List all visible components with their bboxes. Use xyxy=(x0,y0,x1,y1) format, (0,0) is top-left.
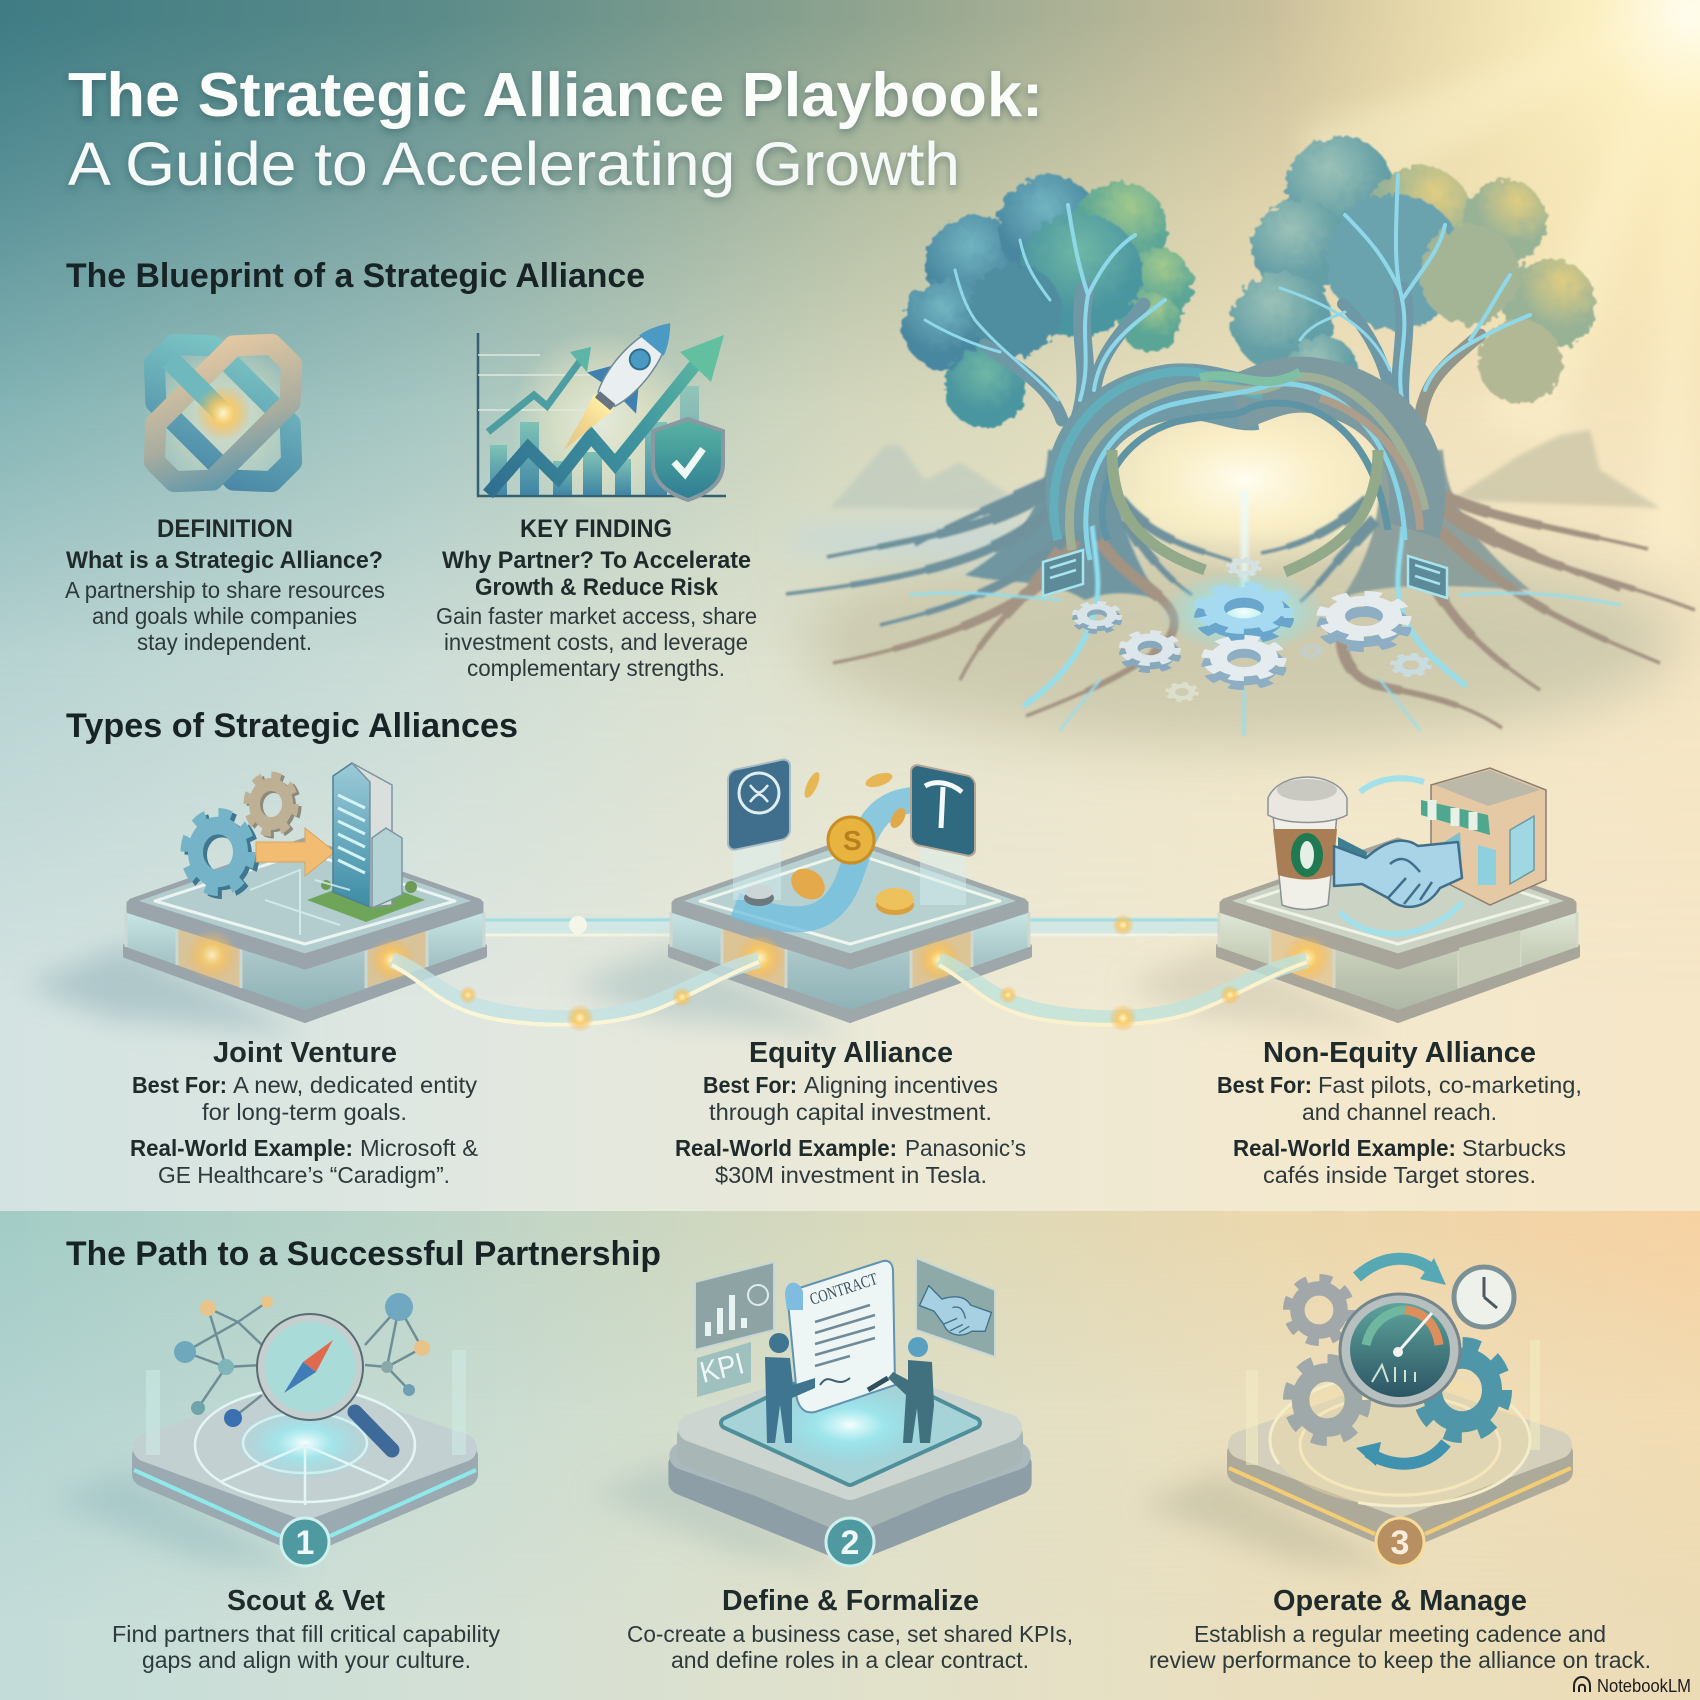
gears on the ground xyxy=(1075,558,1429,701)
step shadows xyxy=(50,1460,1400,1570)
text block: key finding: complementary strengths. xyxy=(467,655,725,681)
text block: define and formalize: and define roles in a clear contract. xyxy=(671,1647,1029,1673)
panel: non-equity alliance platform and icon xyxy=(1218,768,1578,1021)
trees: trunks and branches xyxy=(925,175,1530,420)
badge 2: 2 xyxy=(841,1524,859,1562)
heading: path: The Path to a Successful Partnership xyxy=(66,1235,661,1273)
text block: key finding: Growth & Reduce Risk xyxy=(475,574,719,601)
radar rings xyxy=(195,1388,415,1505)
text block: equity alliance xyxy=(675,1037,1026,1188)
text block: scout and vet xyxy=(112,1585,500,1673)
panel: step 2 define and formalize xyxy=(682,1258,1018,1566)
text block: operate and manage xyxy=(1149,1585,1651,1673)
illustration: two trees with intertwined roots and gears xyxy=(780,136,1695,745)
panel: step 1 scout and vet xyxy=(134,1293,476,1566)
contract scroll xyxy=(785,1261,895,1412)
clock xyxy=(1454,1267,1514,1327)
text block: definition: stay independent. xyxy=(137,629,312,655)
network nodes xyxy=(174,1293,430,1427)
panel: handshake xyxy=(915,1258,995,1357)
text block: non-equity alliance: Fast pilots, co-marketing, xyxy=(1318,1072,1582,1098)
trees: root flares xyxy=(965,450,1530,600)
icon: arrows xyxy=(1340,778,1462,934)
icon: coffee cup xyxy=(1268,777,1347,910)
rings xyxy=(1270,1374,1530,1506)
text block: joint venture: GE Healthcare’s “Caradigm”. xyxy=(158,1162,450,1188)
text block: scout and vet: Scout & Vet xyxy=(227,1585,385,1617)
inner screen xyxy=(726,1362,975,1480)
scene: light beam xyxy=(1241,490,1248,630)
text block: non-equity alliance: and channel reach. xyxy=(1302,1099,1497,1125)
lower connector tubes between platforms xyxy=(392,960,1307,1032)
icon: coins: S xyxy=(843,825,862,856)
text block: scout and vet: Find partners that fill critical capability xyxy=(112,1621,500,1647)
title: A Guide to Accelerating Growth xyxy=(68,130,960,198)
icon: GE card xyxy=(728,758,790,900)
text block: operate and manage: Operate & Manage xyxy=(1273,1585,1527,1617)
scene: central glow xyxy=(1075,385,1415,575)
icon: interlocked links xyxy=(136,326,310,500)
text block: joint venture: Best For: xyxy=(132,1072,227,1098)
scene: landscape xyxy=(780,430,1680,745)
text block: scout and vet: gaps and align with your culture. xyxy=(142,1647,471,1673)
heading: blueprint: The Blueprint of a Strategic Alliance xyxy=(66,257,645,295)
icon: coins xyxy=(744,770,914,915)
text block: equity alliance: through capital investment. xyxy=(709,1099,992,1125)
text block: joint venture: Real-World Example: xyxy=(130,1135,353,1161)
text block: joint venture: Joint Venture xyxy=(213,1037,397,1069)
text block: key finding: Gain faster market access, share xyxy=(436,603,757,629)
upper connector tubes between platforms xyxy=(480,914,1222,936)
panel: joint venture platform and icon xyxy=(125,763,485,1021)
figures xyxy=(765,1333,934,1443)
circuit lines on platform xyxy=(250,870,350,935)
text block: operate and manage: review performance to keep the alliance on track. xyxy=(1149,1647,1651,1673)
badge 2 xyxy=(826,1518,874,1566)
panel: dashboard xyxy=(695,1262,774,1350)
glowing edge xyxy=(134,1470,476,1536)
heading: types: Types of Strategic Alliances xyxy=(66,707,518,745)
tree left: crown xyxy=(902,176,1193,428)
icon: magnifier with compass xyxy=(257,1314,392,1450)
badge 3 xyxy=(1376,1518,1424,1566)
text block: joint venture: for long-term goals. xyxy=(202,1099,407,1125)
text block: key finding: investment costs, and leverage xyxy=(444,629,748,655)
icon: tower on green base xyxy=(307,763,425,922)
trees: root system xyxy=(786,470,1695,735)
holographic bars xyxy=(1246,1340,1540,1465)
text block: non-equity alliance: Best For: xyxy=(1217,1072,1312,1098)
cycle arrows xyxy=(1356,1258,1446,1466)
icon: growth chart with rocket and shield xyxy=(478,304,726,510)
text block: definition: What is a Strategic Alliance? xyxy=(66,547,383,574)
background gradient, upper area xyxy=(0,0,1700,1211)
icon: storefront xyxy=(1421,768,1546,905)
text block: definition: and goals while companies xyxy=(92,603,357,629)
text block: define and formalize: Co-create a business case, set shared KPIs, xyxy=(627,1621,1073,1647)
text block: operate and manage: Establish a regular meeting cadence and xyxy=(1194,1621,1606,1647)
sunburst, top right xyxy=(1270,0,1700,560)
text block: equity alliance: Aligning incentives xyxy=(804,1072,998,1098)
text block: equity alliance: $30M investment in Tesla. xyxy=(715,1162,987,1188)
text block: definition: A partnership to share resources xyxy=(65,577,385,603)
text block: equity alliance: Best For: xyxy=(703,1072,797,1098)
icon: gears xyxy=(185,775,298,894)
icon: capital flow ribbon xyxy=(735,800,915,919)
text block: equity alliance: Equity Alliance xyxy=(749,1037,953,1069)
badge 3: 3 xyxy=(1391,1524,1409,1562)
text block: non-equity alliance: Non-Equity Alliance xyxy=(1263,1037,1536,1069)
text block: equity alliance: Real-World Example: xyxy=(675,1135,897,1161)
text block: non-equity alliance: cafés inside Target stores. xyxy=(1263,1162,1536,1188)
text block: non-equity alliance: Real-World Example: xyxy=(1233,1135,1456,1161)
text block: non-equity alliance xyxy=(1217,1037,1582,1188)
trees: intertwined arch xyxy=(1054,371,1425,572)
text block: joint venture: A new, dedicated entity xyxy=(233,1072,478,1098)
icon: Tesla card xyxy=(911,764,975,905)
panel: KPI: KPI xyxy=(697,1347,747,1390)
platform shadows xyxy=(25,945,1395,1035)
badge 1: 1 xyxy=(296,1524,314,1562)
title: The Strategic Alliance Playbook: xyxy=(68,61,1043,130)
trees: circuit chips in roots xyxy=(1043,550,1447,598)
text block: joint venture: Microsoft & xyxy=(360,1135,478,1161)
icon: arrow xyxy=(256,828,335,876)
text block: define and formalize: Define & Formalize xyxy=(722,1585,979,1617)
text block: definition: DEFINITION xyxy=(157,515,293,543)
tree right: crown xyxy=(1232,136,1596,408)
gears xyxy=(1287,1278,1506,1440)
badge 1 xyxy=(281,1518,329,1566)
text block: equity alliance: Panasonic’s xyxy=(905,1135,1026,1161)
glowing edge xyxy=(1229,1468,1571,1534)
title xyxy=(68,61,1043,198)
panel: equity alliance platform and icon xyxy=(670,758,1030,1021)
text block: joint venture xyxy=(130,1037,478,1188)
text block: key finding xyxy=(436,515,757,681)
text block: definition xyxy=(65,515,385,655)
background gradient, lower band xyxy=(0,1211,1700,1700)
icon: handshake xyxy=(1334,832,1462,907)
watermark: NotebookLM: NotebookLM xyxy=(1597,1676,1691,1696)
holographic bars xyxy=(146,1350,466,1455)
gauge xyxy=(1340,1294,1460,1406)
text block: key finding: Why Partner? To Accelerate xyxy=(442,547,751,574)
text block: define and formalize xyxy=(627,1585,1073,1673)
contract scroll: CONTRACT xyxy=(807,1269,880,1309)
panel: step 3 operate and manage xyxy=(1229,1258,1571,1566)
text block: non-equity alliance: Starbucks xyxy=(1462,1135,1566,1161)
text block: key finding: KEY FINDING xyxy=(520,515,672,543)
